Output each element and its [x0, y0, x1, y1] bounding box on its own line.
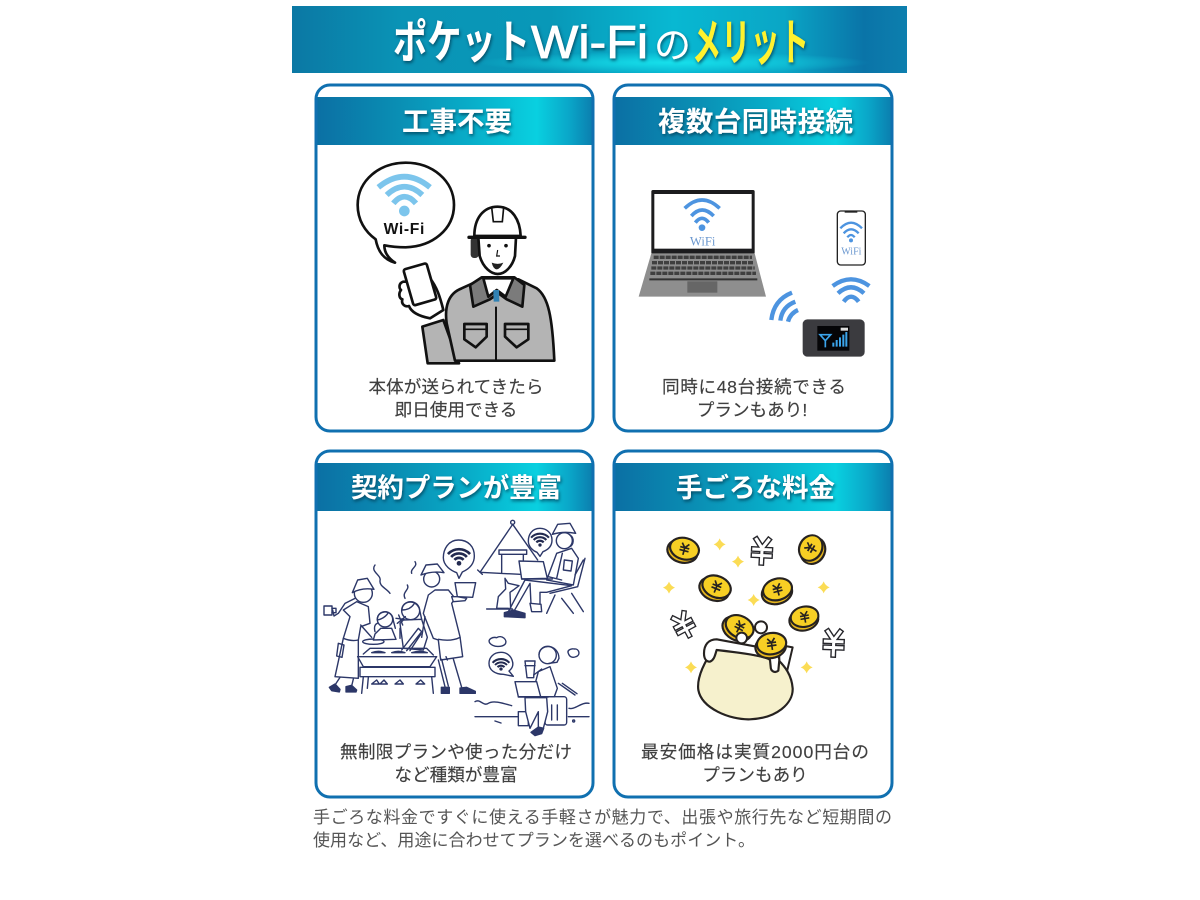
icon: laptop, phone and router	[639, 190, 869, 357]
title text: Wi-Fi	[531, 16, 648, 68]
heading: 契約プランが豊富: 契約プランが豊富	[351, 473, 562, 503]
title text: ポケット	[393, 16, 530, 68]
illustration: camper and dog by tent	[475, 520, 589, 736]
caption: 即日使用できる	[395, 400, 517, 420]
panel: 複数台同時接続	[614, 85, 892, 431]
illustration: barbecue group	[324, 540, 476, 693]
title text: の	[654, 25, 691, 66]
icon: worker with phone and Wi-Fi bubble: Wi-Fi	[384, 221, 425, 238]
footer text: 使用など、用途に合わせてプランを選べるのもポイント。	[313, 830, 755, 850]
heading: 工事不要: 工事不要	[402, 106, 512, 137]
illustration: falling coins and yen marks	[663, 531, 842, 673]
panel: 手ごろな料金	[614, 451, 892, 797]
illustration: coin purse	[698, 610, 793, 719]
panel: 工事不要	[316, 85, 593, 431]
title banner	[292, 6, 907, 73]
heading: 複数台同時接続: 複数台同時接続	[658, 106, 854, 137]
footer text: 手ごろな料金ですぐに使える手軽さが魅力で、出張や旅行先など短期間の	[313, 807, 892, 827]
caption: 最安価格は実質2000円台の	[641, 742, 869, 762]
caption: など種類が豊富	[394, 765, 518, 785]
caption: 無制限プランや使った分だけ	[340, 742, 572, 762]
icon: laptop, phone and router: WiFi	[690, 234, 716, 248]
heading: 手ごろな料金: 手ごろな料金	[676, 473, 836, 503]
caption: プランもあり	[702, 765, 808, 785]
title text: メリット	[692, 15, 809, 71]
icon: laptop, phone and router: WiFi	[841, 246, 862, 257]
caption: プランもあり!	[697, 400, 807, 420]
caption: 同時に48台接続できる	[662, 377, 846, 397]
panel: 契約プランが豊富	[316, 451, 593, 797]
caption: 本体が送られてきたら	[369, 377, 543, 397]
icon: worker with phone and Wi-Fi bubble	[358, 163, 554, 363]
